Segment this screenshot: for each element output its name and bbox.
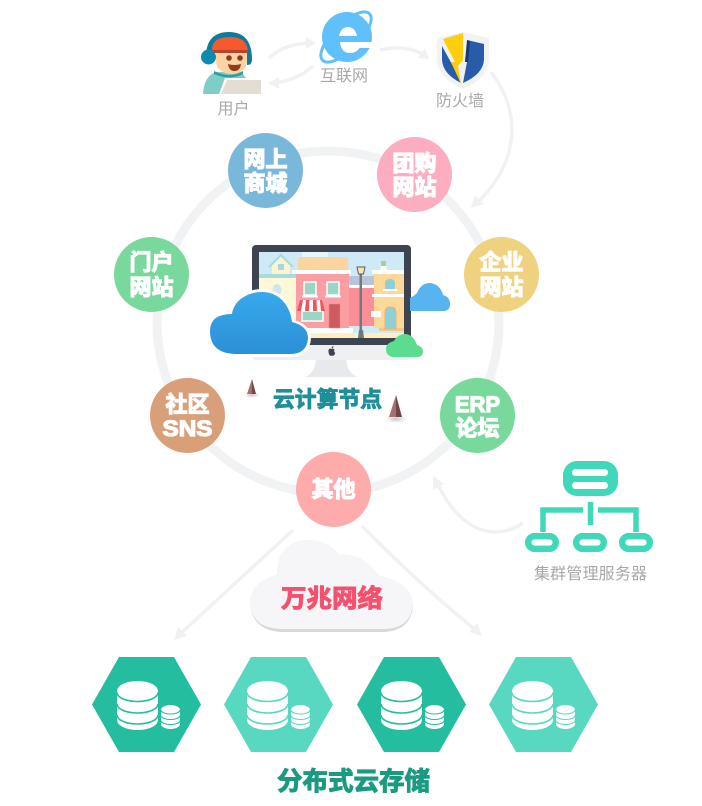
- node: ERP forum: [440, 378, 515, 453]
- label: internet: 互联网: [320, 67, 368, 85]
- heading: 10G network: 万兆网络: [281, 585, 383, 613]
- node: community: SNS: [162, 416, 212, 441]
- arrow: cluster manager to ring: [433, 476, 523, 532]
- node: ERP forum: ERP: [455, 392, 500, 417]
- label: user: 用户: [217, 100, 250, 118]
- central ring: [157, 151, 499, 493]
- node: ERP forum: 论坛: [455, 416, 500, 441]
- icon: apple logo: [328, 346, 335, 356]
- node: enterprise: 企业: [479, 250, 524, 275]
- storage hexagon 4: [489, 657, 598, 752]
- node: group buying: 网站: [392, 175, 437, 200]
- storage hexagon 2: [224, 657, 333, 752]
- label: cluster management server: 集群管理服务器: [534, 565, 647, 583]
- icon: internet: [313, 4, 379, 70]
- node: portal: [114, 237, 189, 312]
- node: group buying: [377, 137, 452, 212]
- node: online mall: 商城: [243, 171, 288, 196]
- node: enterprise: [464, 237, 539, 312]
- storage hexagon 3: [357, 657, 466, 752]
- label: firewall: 防火墙: [436, 92, 484, 110]
- node: online mall: [228, 133, 303, 208]
- node: online mall: 网上: [243, 147, 288, 172]
- arrow: network to left storage: [174, 530, 293, 640]
- icon: firewall shield: [437, 32, 489, 89]
- node: enterprise: 网站: [479, 275, 524, 300]
- icon: monitor: [252, 245, 411, 377]
- icon: user: [201, 32, 261, 94]
- heading: distributed cloud storage: 分布式云存储: [277, 768, 430, 796]
- node: other: 其他: [311, 477, 356, 502]
- node: group buying: 团购: [392, 151, 437, 176]
- node: other: [296, 452, 371, 527]
- arrow: firewall to ring: [471, 72, 512, 208]
- arrow: internet to firewall: [380, 48, 429, 59]
- node: portal: 门户: [129, 250, 174, 275]
- storage hexagon 1: [92, 657, 201, 752]
- icon: green cloud: [386, 334, 423, 357]
- arrow: internet to user: [268, 66, 313, 89]
- node: portal: 网站: [129, 275, 174, 300]
- icon: cluster management server: [528, 461, 650, 549]
- heading: cloud computing node: 云计算节点: [273, 387, 382, 412]
- decorative cones: [244, 379, 407, 423]
- node: community: [150, 378, 225, 453]
- icon: network cloud: [250, 540, 413, 632]
- arrow: network to right storage: [362, 526, 482, 636]
- icon: large blue cloud: [207, 289, 311, 357]
- icon: small blue cloud: [410, 283, 450, 311]
- node: community: 社区: [165, 392, 210, 417]
- arrow: user to internet: [269, 37, 316, 58]
